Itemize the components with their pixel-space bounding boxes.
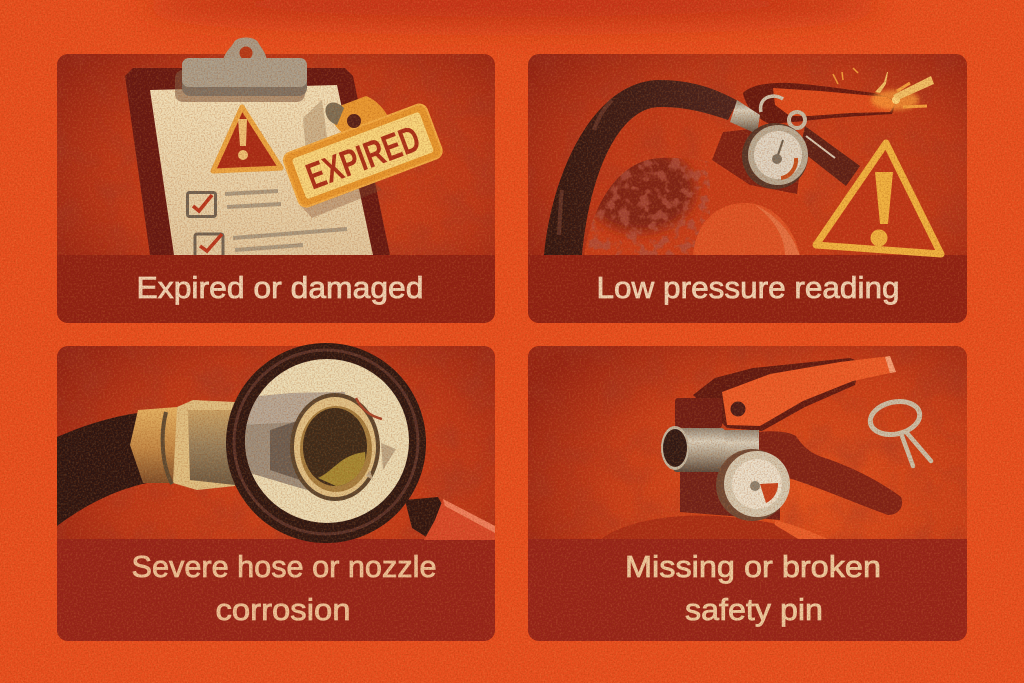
lower handle [758,431,902,515]
neck [680,470,780,520]
caption line one: Missing or broken [625,549,881,584]
icon: detached safety pin [867,397,931,466]
upper lever [693,358,860,431]
fitting [130,400,235,490]
valve barrel [661,426,759,472]
hose [57,413,147,526]
tag: expired [282,96,444,209]
panel: missing or broken safety pin [528,346,967,641]
caption line two: safety pin [685,592,823,627]
caption band [57,539,495,641]
icon: gauge [716,449,790,521]
hose [544,80,738,255]
caption line two: corrosion [216,592,350,627]
tag: expired: EXPIRED [301,118,426,197]
icon: large warning triangle [816,143,941,254]
illustration: extinguisher valve head [600,356,902,540]
checklist row two [195,229,347,260]
icon: warning triangle on paper [213,107,281,171]
lower handle [800,126,860,186]
caption band [528,539,967,641]
icon: pressure gauge [742,123,808,189]
collar [730,100,760,134]
extinguisher dome [584,158,826,255]
icon: magnifying glass [226,343,495,543]
handle [405,497,495,540]
checklist row one [188,191,281,216]
illustration: extinguisher with hose and gauge [544,80,897,256]
icon: spark [833,68,934,110]
caption band [57,255,495,323]
upper lever [743,83,897,124]
illustration: clipboard with expired tag [125,38,390,260]
caption band [528,255,967,323]
panel: severe hose or nozzle corrosion [57,343,495,641]
caption text: Low pressure reading [596,270,900,305]
illustration: hose and brass fitting [57,400,235,526]
panel: expired or damaged [57,38,495,323]
lens content: corroded nozzle [240,392,396,501]
icon: metal clip [175,38,307,102]
panel: low pressure reading [528,54,967,323]
dome [602,516,798,539]
caption text: Expired or damaged [136,270,424,305]
caption line one: Severe hose or nozzle [132,549,436,584]
